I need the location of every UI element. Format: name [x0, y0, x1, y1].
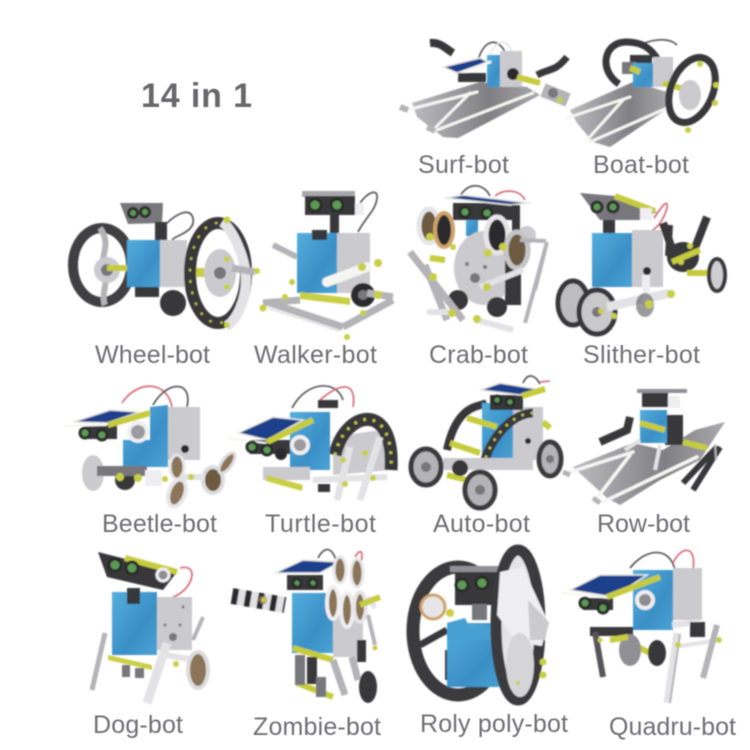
label: Row-bot: Row-bot [597, 510, 690, 538]
robot panel: Wheel-bot [73, 203, 260, 369]
label: Turtle-bot: Turtle-bot [265, 510, 376, 538]
icon: Crab-bot robot [410, 186, 547, 330]
icon: Auto-bot robot [411, 376, 561, 508]
icon: Zombie-bot robot [232, 550, 380, 703]
icon: Dog-bot robot [92, 552, 208, 703]
robot panel: Zombie-bot [232, 550, 381, 741]
icon: Slither-bot robot [558, 193, 725, 334]
robot panel: Turtle-bot [228, 386, 391, 538]
icon: Roly poly-bot robot [413, 550, 549, 700]
label: Walker-bot: Walker-bot [254, 341, 377, 369]
robot panel: Slither-bot [558, 193, 725, 369]
icon: Boat-bot robot [567, 40, 724, 147]
label: Auto-bot: Auto-bot [433, 510, 530, 538]
robot panel: Crab-bot [410, 186, 547, 369]
robot panel: Boat-bot [567, 40, 724, 179]
icon: Surf-bot robot [400, 42, 568, 138]
icon: Turtle-bot robot [228, 386, 391, 500]
label: Roly poly-bot: Roly poly-bot [420, 710, 568, 738]
label: Zombie-bot: Zombie-bot [253, 713, 381, 741]
robot panel: Row-bot [563, 389, 725, 538]
title: 14 in 1 [141, 77, 252, 115]
robot panel: Dog-bot [92, 552, 208, 739]
icon: Row-bot robot [563, 389, 725, 505]
label: Surf-bot: Surf-bot [418, 151, 509, 179]
label: Slither-bot: Slither-bot [583, 341, 700, 369]
robot panel: Surf-bot [400, 42, 568, 179]
icon: Beetle-bot robot [65, 386, 238, 509]
label: Beetle-bot: Beetle-bot [102, 510, 217, 538]
robot panel: Auto-bot [411, 376, 561, 538]
icon: Quadru-bot robot [562, 550, 722, 703]
label: Wheel-bot: Wheel-bot [95, 341, 210, 369]
label: Crab-bot: Crab-bot [429, 341, 528, 369]
robot panel: Beetle-bot [65, 386, 238, 538]
robot panel: Walker-bot [254, 191, 393, 369]
label: Dog-bot: Dog-bot [93, 711, 183, 739]
label: Quadru-bot: Quadru-bot [609, 713, 736, 741]
robot panel: Roly poly-bot [413, 550, 568, 738]
robot panel: Quadru-bot [562, 550, 736, 741]
icon: Walker-bot robot [260, 191, 393, 340]
label: Boat-bot: Boat-bot [593, 151, 689, 179]
icon: Wheel-bot robot [73, 203, 260, 328]
